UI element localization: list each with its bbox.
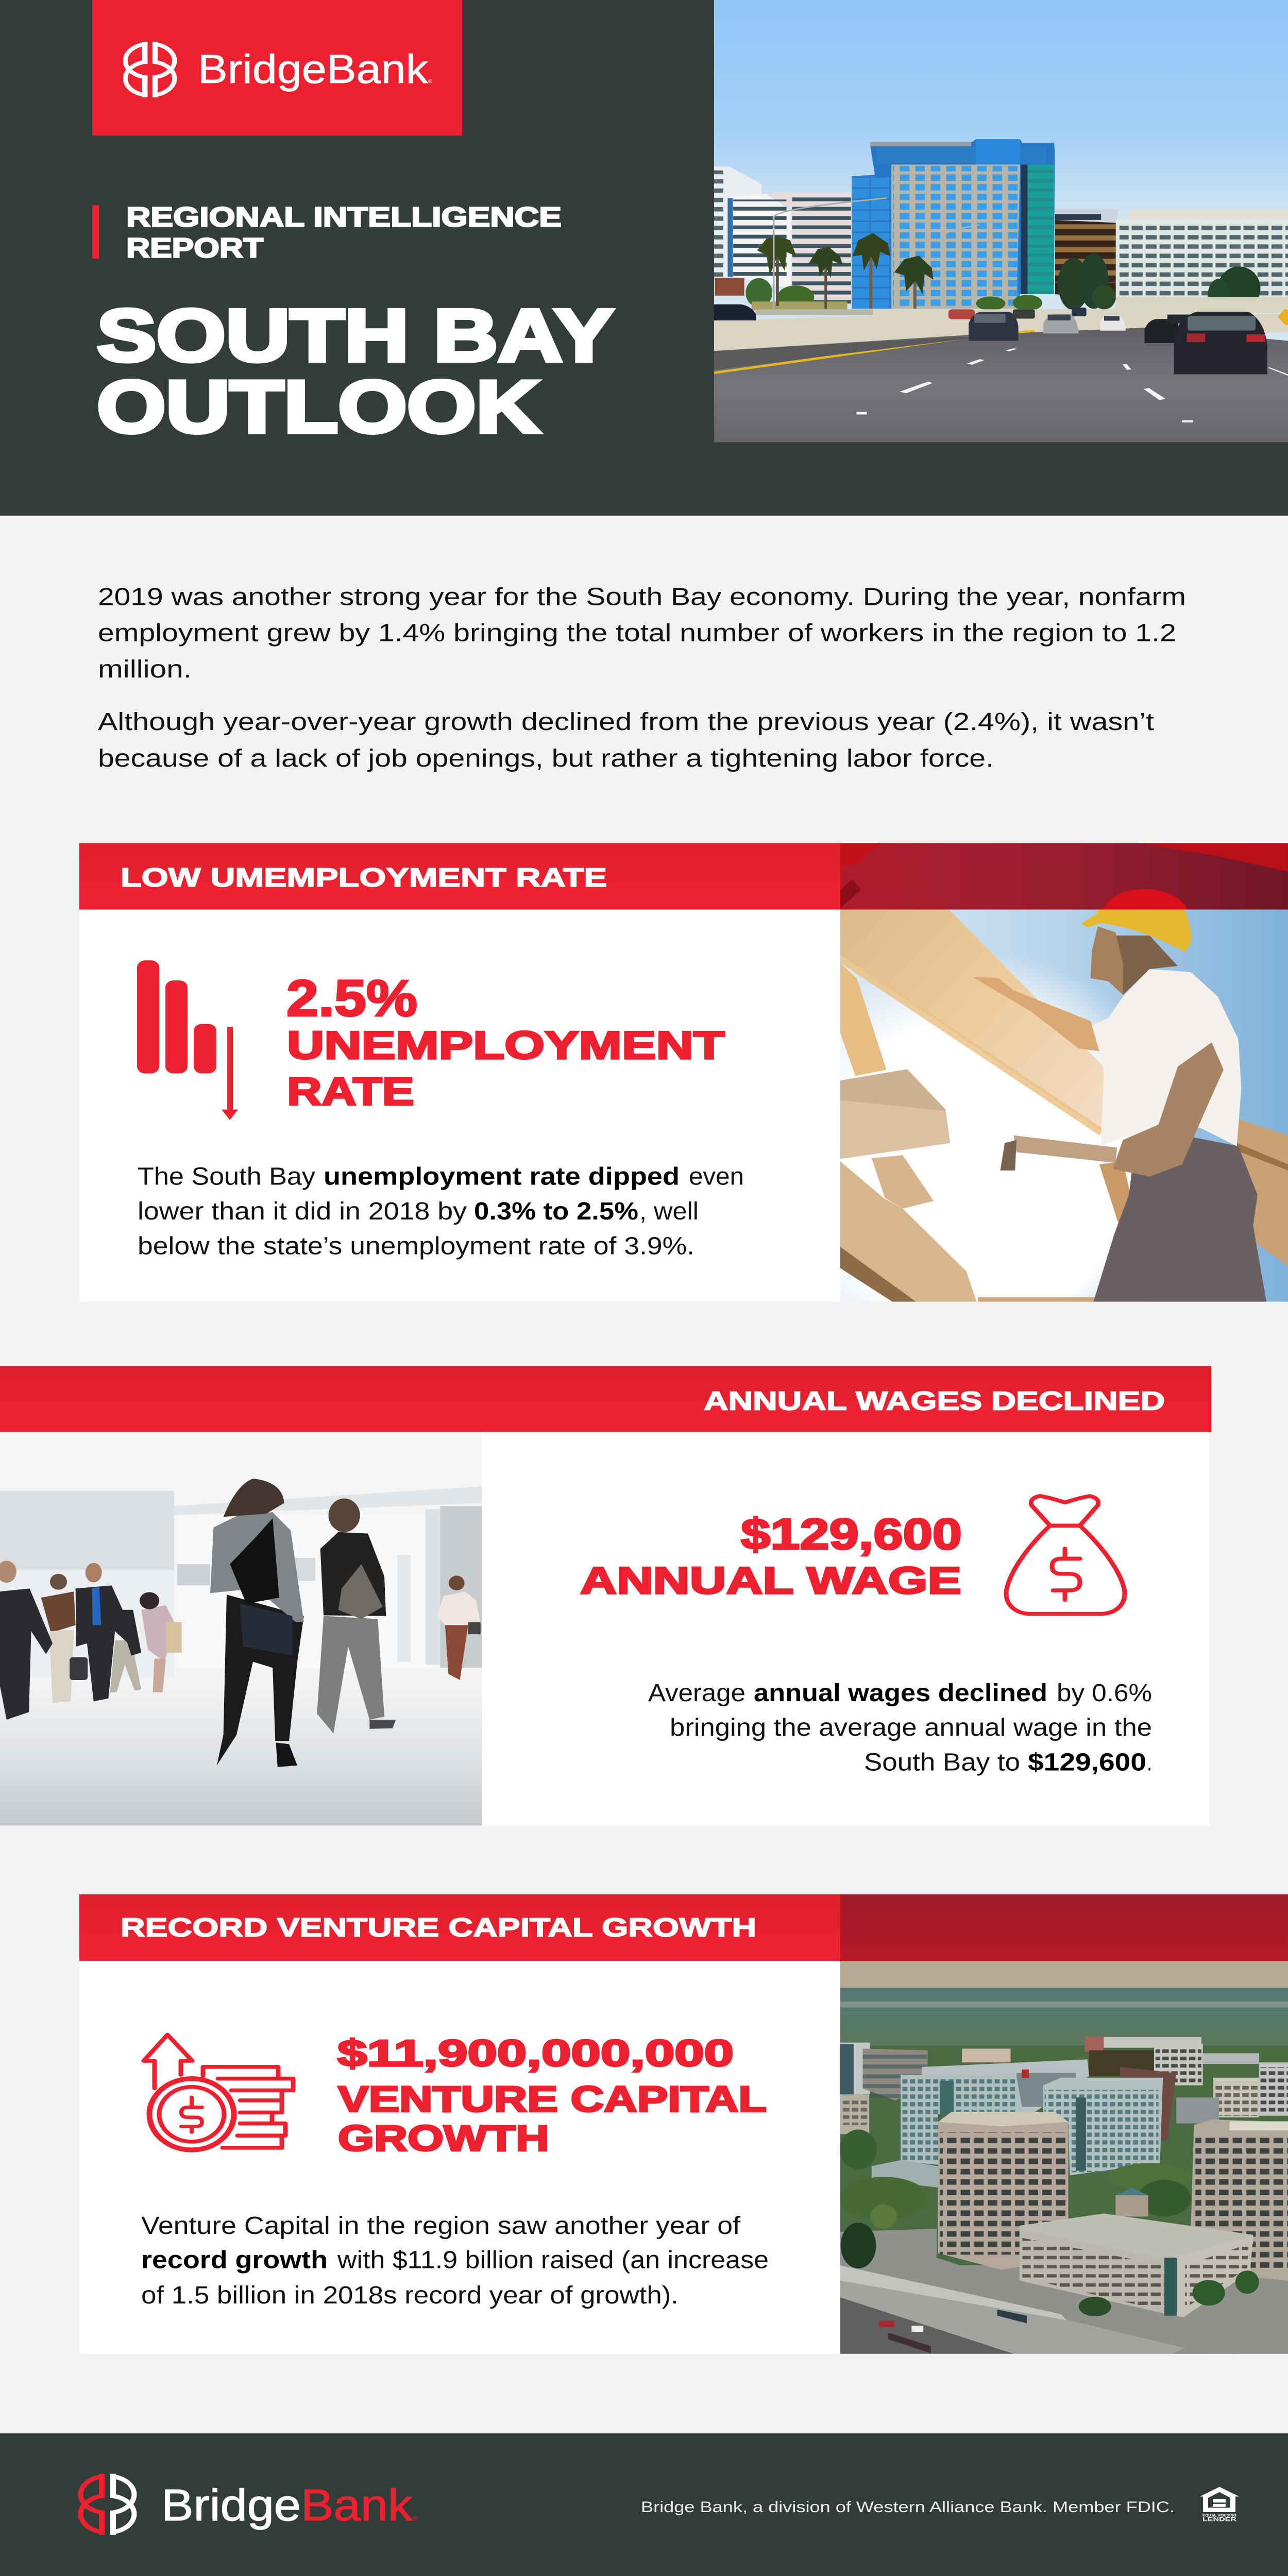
title: SOUTH BAY <box>97 295 614 377</box>
logo block <box>92 0 462 135</box>
report label: REGIONAL INTELLIGENCE <box>126 201 562 233</box>
body text: South Bay to <box>864 1748 1020 1776</box>
report label <box>126 201 562 263</box>
photo: construction worker <box>840 843 1288 1302</box>
wordmark: Bridge <box>161 2480 301 2530</box>
people <box>0 1479 481 1767</box>
intro text: because of a lack of job openings, but rather a tightening labor force. <box>98 744 994 772</box>
stat: annual wage: $129,600 <box>741 1510 962 1558</box>
stat: 2.5% unemployment rate: RATE <box>287 1070 414 1113</box>
body text: of 1.5 billion in 2018s record year of growth). <box>141 2281 679 2309</box>
section heading band: ANNUAL WAGES DECLINED <box>704 1386 1165 1416</box>
panel: record venture capital growth <box>79 1894 1288 2354</box>
icon: money bag <box>1006 1496 1125 1614</box>
photo: aerial view of downtown San Jose <box>839 1894 1288 2354</box>
body text <box>141 2212 769 2309</box>
body text: below the state’s unemployment rate of 3.9%. <box>138 1232 694 1260</box>
intro text <box>98 583 1186 772</box>
body text: record growth <box>141 2246 328 2274</box>
body text <box>648 1679 1152 1776</box>
cars on the freeway <box>714 304 1288 374</box>
header panel <box>0 0 1288 516</box>
body text: with $11.9 billion raised (an increase <box>337 2246 769 2274</box>
body text: unemployment rate dipped <box>324 1163 680 1191</box>
body text: . <box>1147 1748 1152 1776</box>
icon: equal housing lender: LENDER <box>1202 2516 1236 2522</box>
report label: REPORT <box>126 232 263 263</box>
section heading band: RECORD VENTURE CAPITAL GROWTH <box>121 1913 756 1942</box>
wordmark <box>161 2480 417 2530</box>
icon: falling bar chart with arrow <box>137 960 238 1120</box>
palm trees <box>757 233 934 309</box>
panel: annual wages declined <box>0 1366 1211 1825</box>
icon: equal housing lender: EQUAL HOUSING <box>1202 2513 1236 2517</box>
body text: 0.3% to 2.5% <box>474 1197 638 1225</box>
section heading band <box>79 1894 840 1961</box>
stat: 2.5% unemployment rate <box>286 970 725 1113</box>
panel: low unemployment rate <box>79 843 1288 1302</box>
disclosure text: Bridge Bank, a division of Western Alliance Bank. Member FDIC. <box>641 2498 1175 2515</box>
stat: 2.5% unemployment rate: UNEMPLOYMENT <box>287 1023 725 1067</box>
body text: bringing the average annual wage in the <box>670 1714 1152 1741</box>
body text: even <box>689 1163 744 1191</box>
intro text: million. <box>98 655 192 683</box>
stat: venture capital growth: VENTURE CAPITAL <box>338 2079 767 2120</box>
body text: $129,600 <box>1028 1748 1146 1776</box>
body text: lower than it did in 2018 by <box>138 1197 467 1225</box>
icon: Bridge Bank mark, red and white <box>80 2474 134 2535</box>
icon: equal housing lender <box>1200 2487 1239 2522</box>
stat: venture capital growth: $11,900,000,000 <box>337 2032 734 2074</box>
body text: annual wages declined <box>754 1679 1047 1707</box>
section heading band <box>79 843 840 909</box>
stat: venture capital growth <box>337 2032 767 2159</box>
accent tick <box>92 205 99 259</box>
photo: commuters walking <box>0 1366 482 1825</box>
footer logo <box>80 2474 417 2535</box>
icon: coins with up arrow <box>144 2035 293 2150</box>
intro text: Although year-over-year growth declined from the previous year (2.4%), it wasn’t <box>98 708 1154 736</box>
section heading band: LOW UMEMPLOYMENT RATE <box>121 863 607 892</box>
logo wordmark: BridgeBank® <box>198 46 432 92</box>
section heading band <box>0 1366 1211 1432</box>
wordmark: Bank® <box>301 2480 417 2530</box>
body text: The South Bay <box>138 1163 316 1191</box>
footer panel <box>0 2433 1288 2576</box>
intro text: employment grew by 1.4% bringing the total number of workers in the region to 1.2 <box>98 619 1176 647</box>
body text <box>138 1163 744 1260</box>
stat: venture capital growth: GROWTH <box>338 2119 549 2159</box>
stat: annual wage: ANNUAL WAGE <box>580 1560 961 1602</box>
intro text: 2019 was another strong year for the South Bay economy. During the year, nonfarm <box>98 583 1186 611</box>
body text: Venture Capital in the region saw another year of <box>141 2212 740 2240</box>
title: OUTLOOK <box>97 366 540 448</box>
body text: Average <box>648 1679 745 1707</box>
body text: , well <box>639 1197 699 1225</box>
title <box>97 295 614 448</box>
photo: freeway and office towers <box>711 0 1288 442</box>
icon: Bridge Bank mark <box>125 42 175 97</box>
stat: annual wage <box>580 1510 962 1602</box>
body text: by 0.6% <box>1057 1679 1152 1707</box>
stat: 2.5% unemployment rate: 2.5% <box>286 970 417 1027</box>
worker figure <box>972 890 1266 1302</box>
